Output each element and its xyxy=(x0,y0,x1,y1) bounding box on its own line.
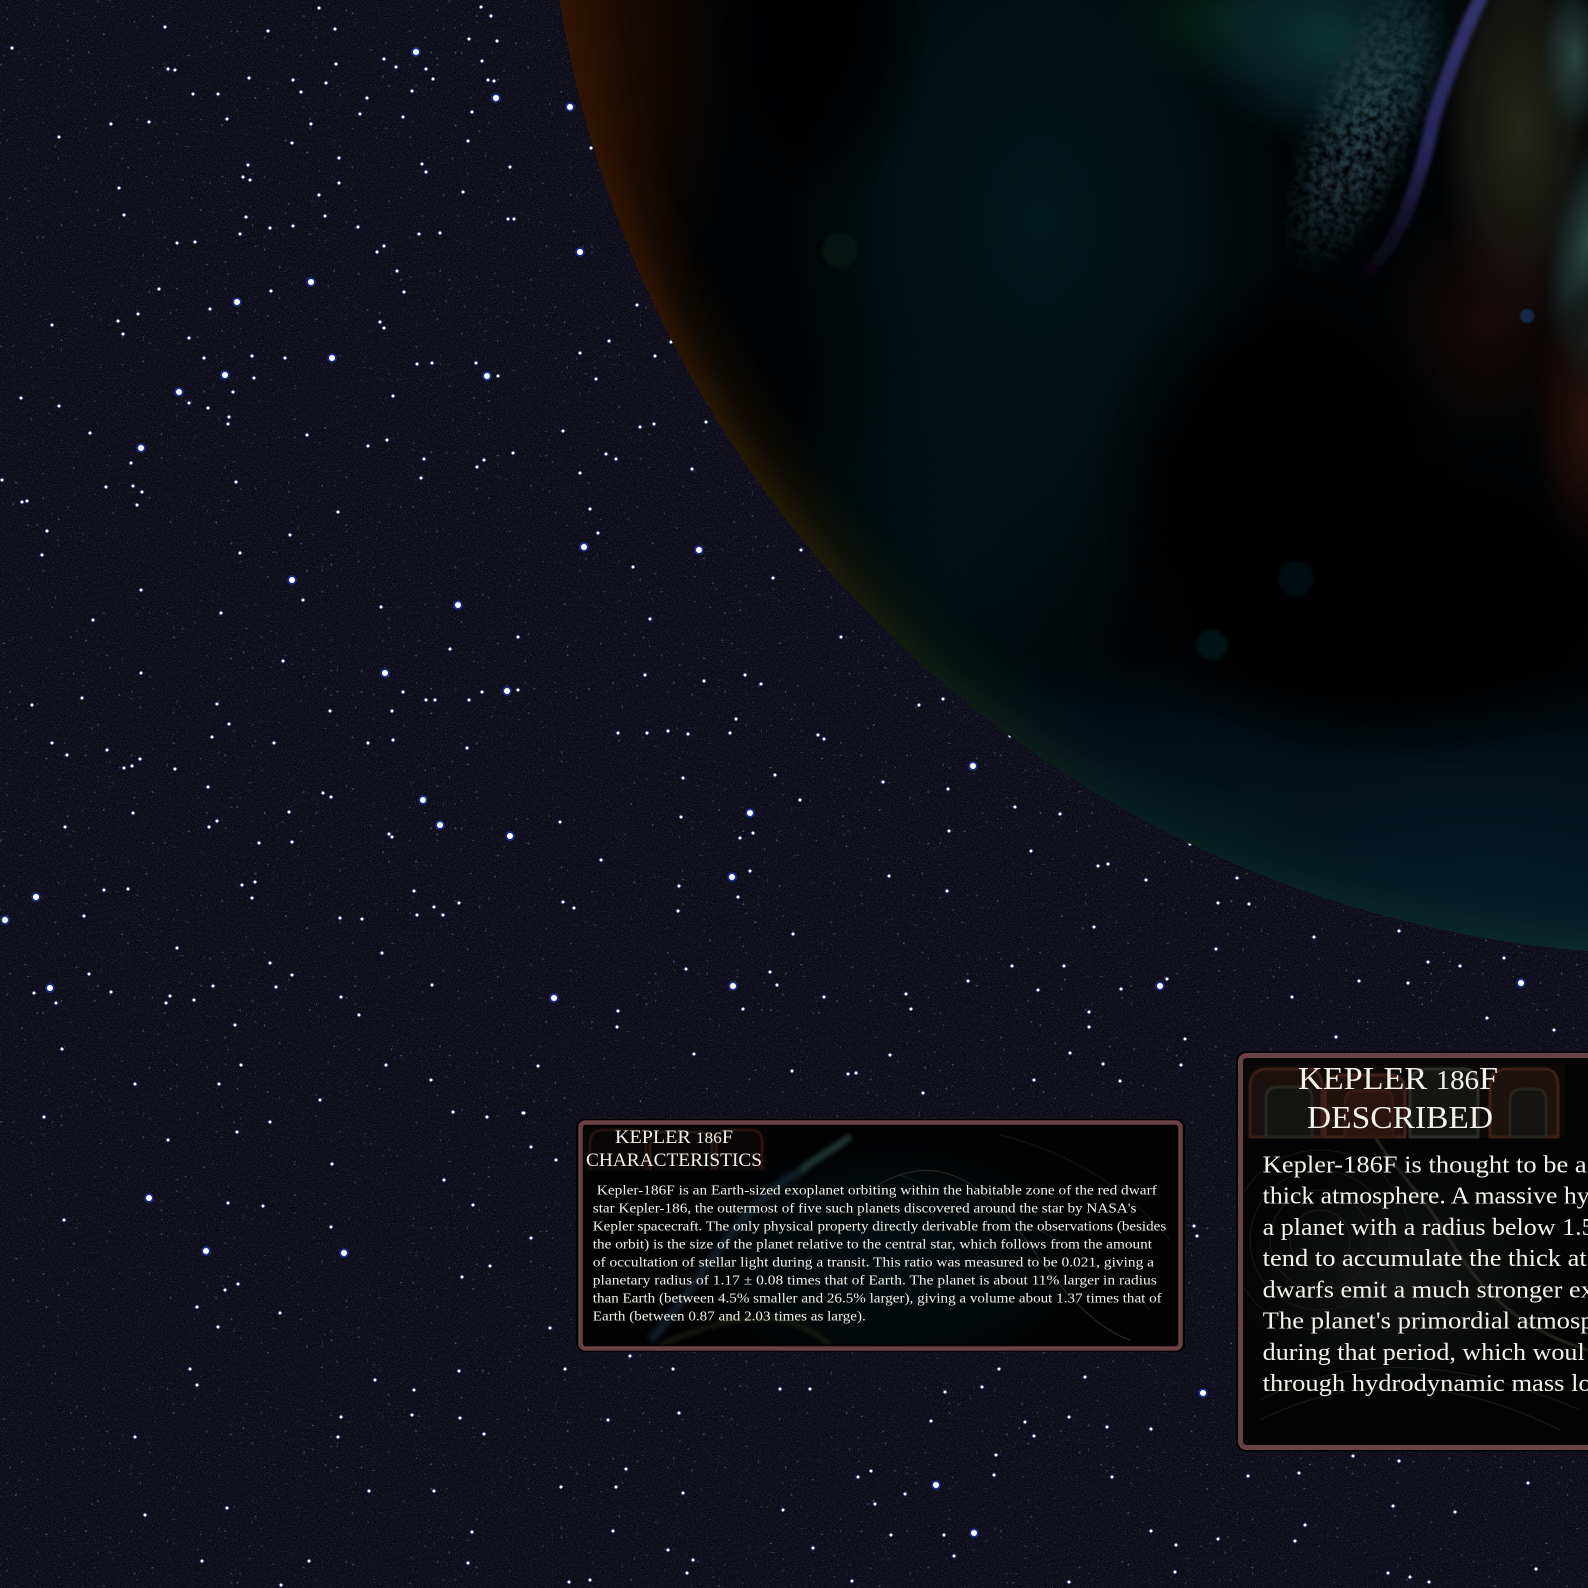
panel body text xyxy=(593,1182,1166,1324)
panel title patch xyxy=(1245,1065,1565,1137)
panel title: DESCRIBED xyxy=(1307,1099,1493,1135)
panel body text: Earth (between 0.87 and 2.03 times as large). xyxy=(593,1308,866,1324)
panel body text: The planet's primordial atmosp xyxy=(1263,1308,1588,1335)
panel body text: Kepler-186F is an Earth-sized exoplanet orbiting within the habitable zone of the red dwarf xyxy=(597,1182,1157,1197)
panel body text: through hydrodynamic mass lo xyxy=(1263,1370,1588,1397)
panel title xyxy=(586,1128,762,1171)
panel body text: Kepler spacecraft. The only physical property directly derivable from the observations (besides xyxy=(593,1218,1166,1234)
panel title: KEPLER 186F xyxy=(615,1128,733,1148)
planet purple streak xyxy=(1365,0,1482,275)
panel body text: planetary radius of 1.17 ± 0.08 times that of Earth. The planet is about 11% larger in radius xyxy=(593,1272,1157,1287)
panel title: KEPLER 186F xyxy=(1298,1060,1498,1096)
planet dark-side tints xyxy=(560,0,1588,951)
panel body text xyxy=(1263,1152,1588,1397)
panel wave texture xyxy=(1230,1137,1588,1430)
panel body text: than Earth (between 4.5% smaller and 26.5% larger), giving a volume about 1.37 times that of xyxy=(593,1290,1162,1306)
panel wave texture xyxy=(647,1133,1170,1345)
panel frame xyxy=(576,1119,1185,1352)
panel: Kepler 186F described xyxy=(1230,1052,1588,1452)
panel body text: tend to accumulate the thick at xyxy=(1263,1245,1587,1272)
panel body text: the orbit) is the size of the planet relative to the central star, which follows from the amount xyxy=(593,1236,1152,1252)
panel body text: dwarfs emit a much stronger ex xyxy=(1263,1276,1588,1303)
panel body text: during that period, which woul xyxy=(1263,1339,1585,1366)
panel title xyxy=(1298,1060,1498,1135)
planet rim glow xyxy=(560,0,1588,951)
panel body text: of occultation of stellar light during a transit. This ratio was measured to be 0.021, giving a xyxy=(593,1254,1154,1269)
panel body text: Kepler-186F is thought to be a xyxy=(1263,1152,1587,1179)
planet: Kepler 186F xyxy=(560,0,1588,952)
panel frame xyxy=(1236,1052,1588,1452)
panel body text: star Kepler-186, the outermost of five such planets discovered around the star by NASA's xyxy=(593,1200,1136,1215)
panel: Kepler 186F characteristics xyxy=(576,1119,1185,1352)
planet small spots xyxy=(822,232,1534,660)
planet cloud band xyxy=(1288,0,1440,260)
panel title patch xyxy=(584,1127,767,1171)
panel body text: thick atmosphere. A massive hy xyxy=(1263,1183,1588,1210)
panel title: CHARACTERISTICS xyxy=(586,1151,762,1171)
panel body text: a planet with a radius below 1.5 xyxy=(1263,1214,1588,1241)
